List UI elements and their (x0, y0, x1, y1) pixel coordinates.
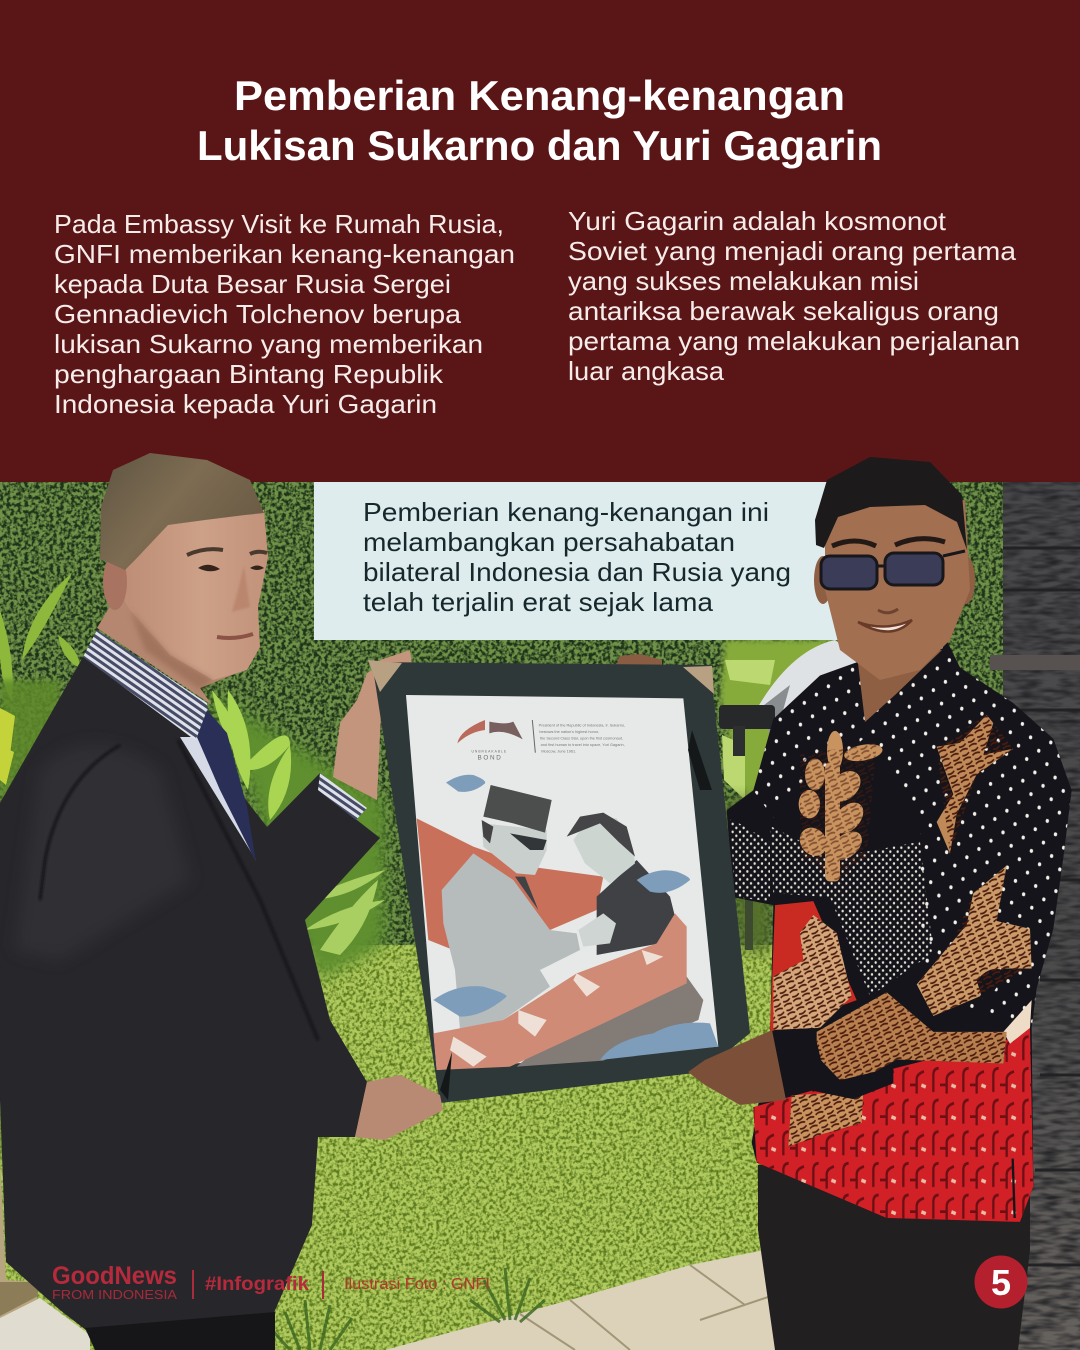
white dots (753, 634, 1072, 1028)
footer branding (52, 1262, 490, 1302)
tan motif left (773, 915, 852, 1030)
tan motif sprig (796, 731, 883, 881)
right paragraph: Soviet yang menjadi orang pertama (568, 236, 1017, 266)
face (103, 500, 268, 680)
separators (193, 1270, 323, 1299)
brown batik strokes (773, 715, 1032, 1147)
hair (100, 453, 264, 570)
hand (578, 913, 616, 947)
left paragraph: penghargaan Bintang Republik (54, 359, 444, 389)
dark lower panel (517, 977, 703, 1067)
painting paper (406, 695, 718, 1070)
ear left (814, 556, 832, 604)
lapel and sleeve seams (40, 740, 318, 1040)
low plants (272, 1268, 545, 1350)
left paragraph: GNFI memberikan kenang-kenangan (54, 239, 515, 269)
poster caption: Moscow, June 1961. (541, 749, 576, 753)
caption divider (532, 720, 535, 753)
cuff (770, 1028, 893, 1099)
Gagarin jacket (597, 860, 675, 955)
callout text: melambangkan persahabatan (363, 527, 735, 557)
umbrella and camera gear (719, 640, 862, 950)
tape corners (368, 660, 714, 694)
upper hand (333, 650, 412, 800)
eyebrows (832, 539, 945, 546)
logo: GoodNews (52, 1262, 177, 1290)
cream strip (1003, 1000, 1032, 1044)
Gagarin head (573, 817, 635, 883)
title: Pemberian Kenang-kenangan (234, 72, 845, 119)
batik shirt (727, 634, 1072, 1222)
hem slit (1013, 1159, 1015, 1218)
logo wordmark: UNBREAKABLE (472, 750, 507, 754)
neck (857, 650, 942, 722)
nose shading (232, 565, 250, 612)
paving stones (0, 1160, 782, 1350)
logo flag dark (489, 722, 523, 739)
logo (52, 1262, 178, 1302)
nose (878, 609, 898, 613)
face (825, 500, 970, 680)
callout text: telah terjalin erat sejak lama (363, 587, 714, 617)
right paragraph: pertama yang melakukan perjalanan (568, 326, 1020, 356)
trousers (85, 1312, 275, 1350)
right paragraph: antariksa berawak sekaligus orang (568, 296, 999, 326)
shirt base (727, 634, 1072, 1222)
neck (97, 590, 240, 705)
framed painting (368, 654, 750, 1103)
left paragraph: Pada Embassy Visit ke Rumah Rusia, (54, 209, 504, 239)
red batik bottom (753, 1028, 1033, 1222)
Sukarno coat (442, 853, 580, 1030)
page number badge (974, 1256, 1028, 1308)
striped collar (83, 630, 208, 740)
title: Lukisan Sukarno dan Yuri Gagarin (197, 122, 882, 169)
callout text: Pemberian kenang-kenangan ini (363, 497, 769, 527)
batik scarf (433, 913, 687, 1070)
logo flags (457, 720, 485, 743)
dense dots (730, 818, 933, 996)
hedge wall (0, 482, 1010, 962)
logo wordmark: BOND (478, 754, 502, 761)
frame (372, 662, 750, 1103)
right man (727, 457, 1072, 1350)
stone wall (990, 482, 1080, 1350)
suit highlight (15, 745, 190, 960)
logo: FROM INDONESIA (52, 1288, 178, 1302)
Sukarno face (482, 823, 547, 875)
lawn (0, 945, 1010, 1350)
left paragraph: Indonesia kepada Yuri Gagarin (54, 389, 437, 419)
ear right (957, 556, 975, 604)
tan motif elbow (917, 866, 1032, 1016)
photo background: garden and wall (0, 482, 1080, 1350)
red flag (417, 818, 603, 950)
side hair (482, 820, 493, 843)
frame tape reflections (440, 730, 712, 1100)
poster caption (539, 724, 625, 753)
hair (815, 457, 967, 550)
peci hat (483, 785, 552, 833)
right man lower hand (688, 1030, 786, 1105)
callout text (363, 497, 791, 617)
maroon header background (0, 0, 1080, 482)
suit (0, 657, 380, 1337)
black hole in elbow (977, 969, 1003, 1002)
red batik left (770, 901, 857, 1032)
title (197, 72, 882, 169)
right paragraph: Yuri Gagarin adalah kosmonot (568, 206, 947, 236)
left paragraph: lukisan Sukarno yang memberikan (54, 329, 483, 359)
tropical plants left (0, 573, 80, 860)
callout panel (314, 482, 840, 640)
callout text: bilateral Indonesia dan Rusia yang (363, 557, 791, 587)
tan motif lower (788, 1091, 863, 1147)
tie (515, 877, 538, 910)
lawn shadow left (0, 1090, 30, 1160)
page number badge: 5 (991, 1262, 1011, 1303)
fingers behind frame (615, 654, 662, 670)
lower hands (355, 1030, 786, 1140)
shirt front (180, 737, 256, 860)
poster caption: and first human to travel into space, Yuri Gagarin, (541, 743, 625, 747)
tan motif upper right (937, 715, 1013, 854)
eyes (198, 565, 264, 571)
eyebrows (187, 549, 267, 555)
left paragraph: kepada Duta Besar Rusia Sergei (54, 269, 451, 299)
cuff (318, 773, 367, 820)
mouth (217, 634, 253, 638)
tropical plants centre (205, 690, 385, 980)
photo credit: Ilustrasi Foto : GNFI (344, 1276, 490, 1293)
spectacles (510, 833, 547, 850)
tie (197, 710, 256, 862)
poster caption: President of the Republic of Indonesia, Ir. Sukarno, (539, 724, 625, 728)
left man lower hand (355, 1075, 443, 1140)
plants right of frame (720, 482, 1004, 950)
ear (103, 554, 127, 610)
sprig batik strokes (800, 743, 877, 881)
clouds (433, 775, 718, 1060)
left paragraph (54, 209, 515, 419)
trousers (758, 1165, 1030, 1350)
logo wordmark (472, 750, 507, 761)
left man: ambassador (0, 453, 412, 1350)
hashtag: #Infografik (205, 1274, 309, 1295)
poster caption: the Second Class Star, upon the first cosmonaut, (540, 737, 623, 741)
left paragraph: Gennadievich Tolchenov berupa (54, 299, 462, 329)
tan motif forearm (817, 992, 1007, 1087)
right paragraph: luar angkasa (568, 356, 725, 386)
Gagarin hair (567, 813, 635, 857)
glasses (821, 551, 965, 589)
jaw shadow (130, 610, 213, 690)
smile (858, 620, 912, 632)
poster caption: bestows the nation's highest honor, (539, 730, 599, 734)
right paragraph (568, 206, 1020, 386)
right paragraph: yang sukses melakukan misi (568, 266, 919, 296)
